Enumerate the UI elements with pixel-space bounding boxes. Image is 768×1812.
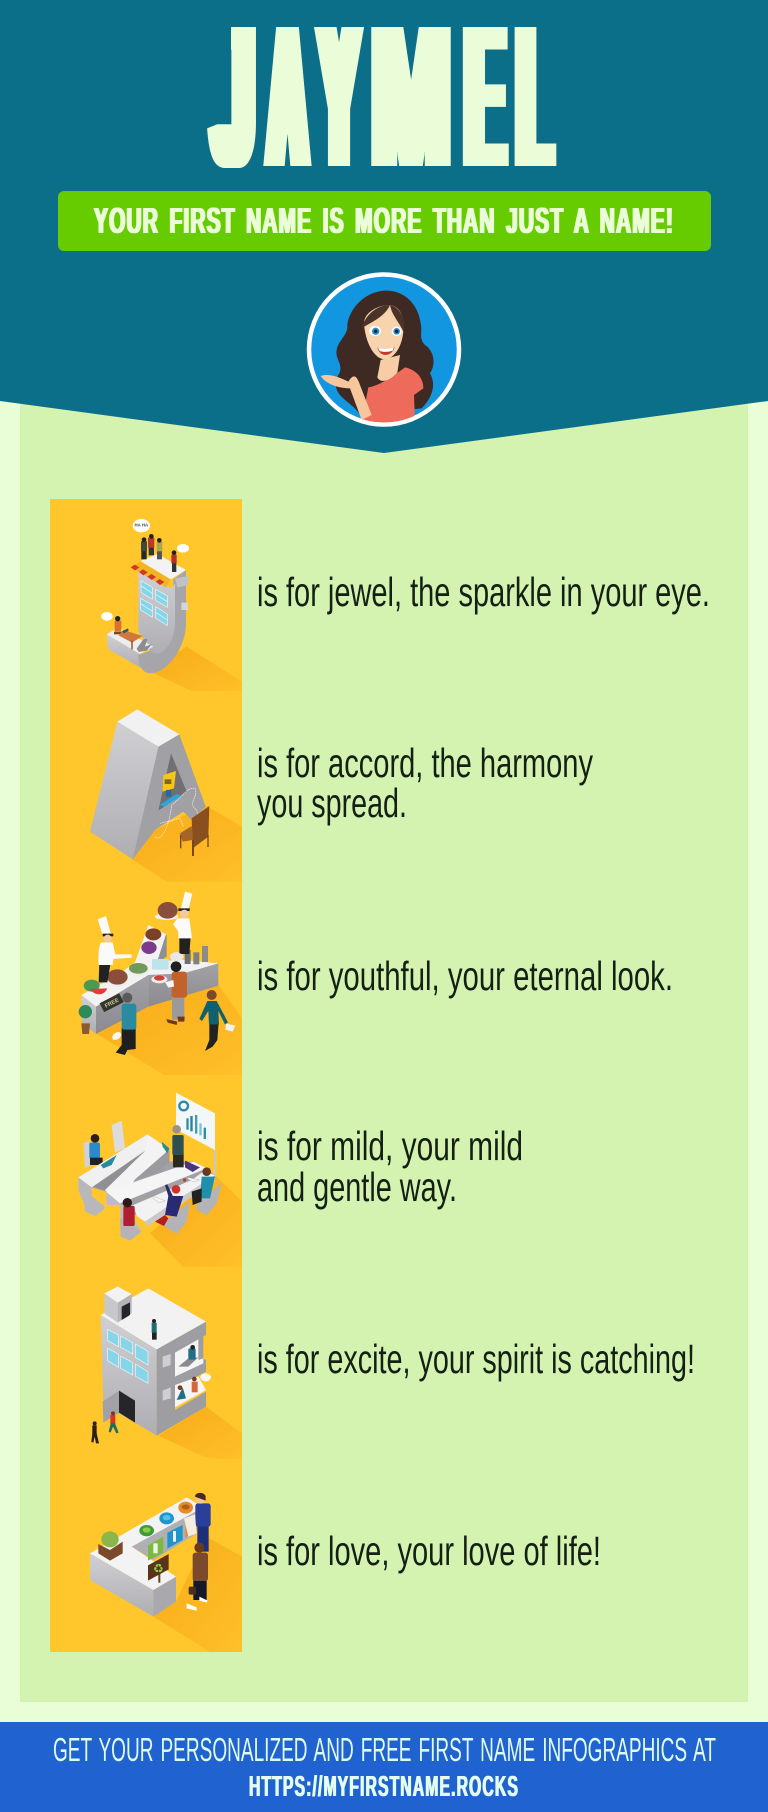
plant	[98, 1531, 123, 1561]
recycling bins	[139, 1502, 197, 1561]
people on roof	[141, 534, 177, 572]
row text: M: and gentle way.	[257, 1164, 457, 1210]
awning	[131, 562, 171, 587]
M shadow	[150, 1175, 242, 1267]
food on the counter	[84, 928, 208, 997]
L block	[90, 1497, 203, 1617]
row text: L: is for love, your love of life!	[257, 1528, 601, 1574]
row text: A: you spread.	[257, 780, 407, 826]
tile J illustration	[101, 519, 242, 693]
M letter table	[78, 1134, 215, 1241]
header band	[0, 0, 768, 453]
windows	[141, 581, 167, 626]
people on balconies	[177, 1345, 211, 1400]
laptop	[101, 1155, 117, 1168]
rooftop stair box	[104, 1287, 132, 1323]
man in teal	[111, 993, 136, 1055]
seated people	[123, 1167, 215, 1226]
E building	[101, 1288, 206, 1436]
A letter body	[90, 709, 206, 859]
tagline bar	[58, 191, 711, 251]
left chef	[98, 916, 132, 982]
buffet counter: FREE	[104, 997, 120, 1010]
row text: A: is for accord, the harmony	[257, 740, 593, 786]
potted plant	[79, 1005, 92, 1034]
tile L illustration	[90, 1493, 242, 1652]
row text: A	[257, 740, 593, 826]
E shadow	[158, 1407, 242, 1462]
E door and entrance	[103, 1391, 135, 1423]
E windows	[108, 1329, 148, 1383]
person at desk	[114, 616, 152, 652]
chair	[180, 806, 209, 856]
A shadow	[132, 805, 242, 882]
woman in green	[199, 990, 235, 1051]
footer URL: HTTPS://MYFIRSTNAME.ROCKS	[249, 1771, 519, 1803]
content panel	[20, 390, 748, 1702]
tile M illustration	[78, 1093, 242, 1267]
tile Y illustration	[79, 892, 242, 1077]
L shadow	[153, 1537, 242, 1652]
yellow illustration column	[50, 499, 242, 1652]
left chairs and person	[83, 1121, 125, 1168]
rooftop person	[152, 1319, 157, 1340]
chairs	[120, 1183, 222, 1241]
tile A illustration	[90, 709, 242, 882]
J letter body	[107, 554, 188, 673]
desk and screen	[159, 771, 182, 807]
walking people	[91, 1411, 119, 1443]
J shadow	[150, 647, 242, 693]
footer	[0, 1722, 768, 1812]
tile E illustration	[91, 1287, 242, 1462]
man in blue	[184, 1493, 211, 1552]
speech bubbles: HA HA	[135, 522, 149, 527]
right chef	[155, 892, 192, 954]
row text: M	[257, 1123, 523, 1210]
presenter	[162, 1125, 184, 1167]
dashed outline figure	[155, 788, 200, 838]
bag and table items	[153, 1161, 200, 1203]
recycling sign: ♻	[153, 1562, 164, 1576]
recycling sign	[148, 1554, 169, 1583]
Y shadow	[96, 985, 242, 1077]
row text: M: is for mild, your mild	[257, 1123, 523, 1169]
customer in orange	[151, 953, 187, 1025]
avatar	[309, 274, 459, 424]
man in brown	[187, 1543, 208, 1611]
buffet counter	[82, 925, 218, 1034]
presentation board	[176, 1093, 216, 1176]
speech bubbles	[101, 519, 189, 621]
